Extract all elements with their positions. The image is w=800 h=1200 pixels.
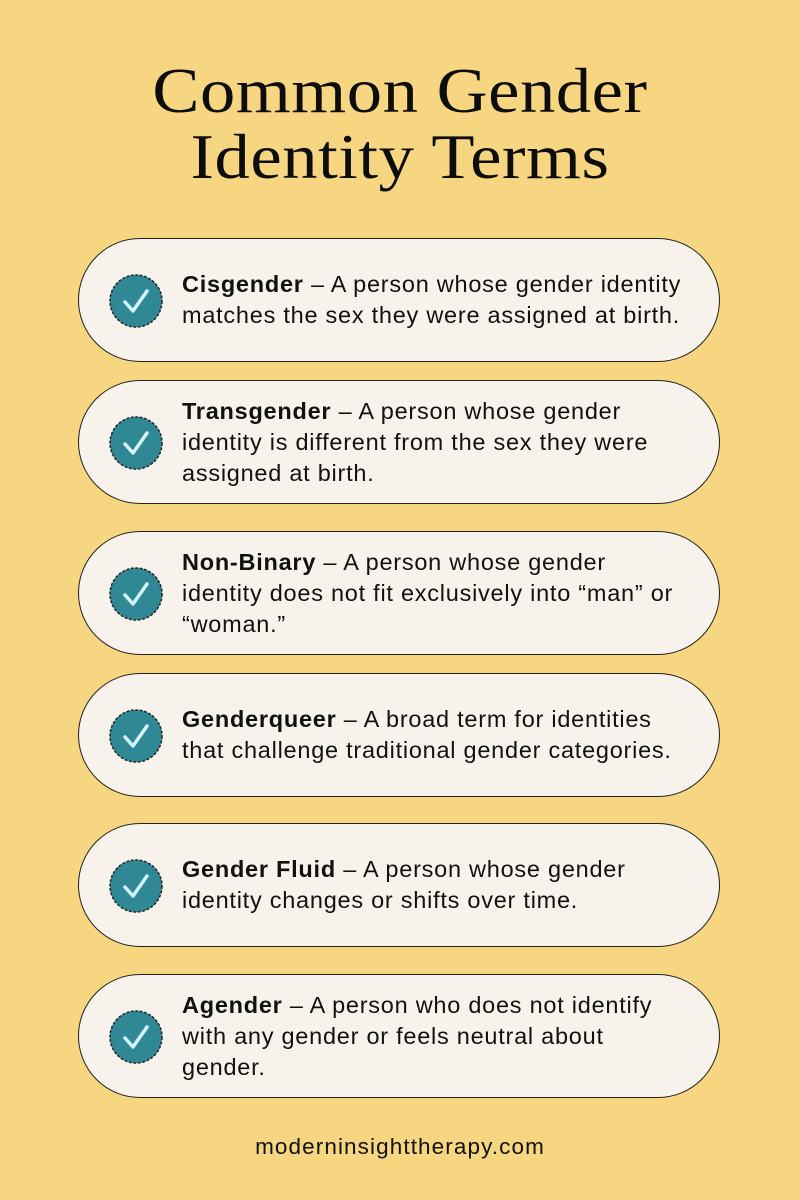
text: cisgender: Cisgender – A person whose gender identity [182,271,681,297]
text: non-binary: identity does not fit exclusively into “man” or [182,580,673,606]
panel: gender fluid [78,823,720,947]
text: agender: Agender – A person who does not identify [182,992,652,1018]
text: transgender: identity is different from the sex they were [182,428,648,454]
panel: agender [78,974,720,1098]
text: genderqueer [182,706,672,763]
text: agender [182,992,652,1080]
text: transgender: assigned at birth. [182,460,374,486]
panel: cisgender [78,238,720,362]
icon: check badge [109,709,163,763]
panel: genderqueer [78,673,720,797]
text: gender fluid: identity changes or shifts over time. [182,887,578,913]
text: genderqueer: Genderqueer – A broad term for identities [182,706,652,732]
title: Identity Terms [190,122,610,192]
title [152,56,648,192]
panel: transgender [78,380,720,504]
text: cisgender [182,271,681,328]
panel: non-binary [78,531,720,655]
text: cisgender: matches the sex they were assigned at birth. [182,302,680,328]
icon: check badge [109,1010,163,1064]
icon: check badge [109,567,163,621]
text: non-binary [182,548,673,636]
footer: website: moderninsighttherapy.com [255,1134,545,1159]
icon: check badge [109,416,163,470]
text: genderqueer: that challenge traditional gender categories. [182,737,672,763]
icon: check badge [109,274,163,328]
text: transgender [182,398,648,486]
icon: check badge [109,859,163,913]
text: agender: gender. [182,1054,266,1080]
text: gender fluid [182,856,626,913]
title: Common Gender [152,56,648,126]
text: non-binary: “woman.” [182,610,286,636]
text: agender: with any gender or feels neutral about [182,1022,604,1048]
text: gender fluid: Gender Fluid – A person whose gender [182,856,626,882]
text: non-binary: Non-Binary – A person whose gender [182,548,606,574]
text: transgender: Transgender – A person whose gender [182,398,621,424]
